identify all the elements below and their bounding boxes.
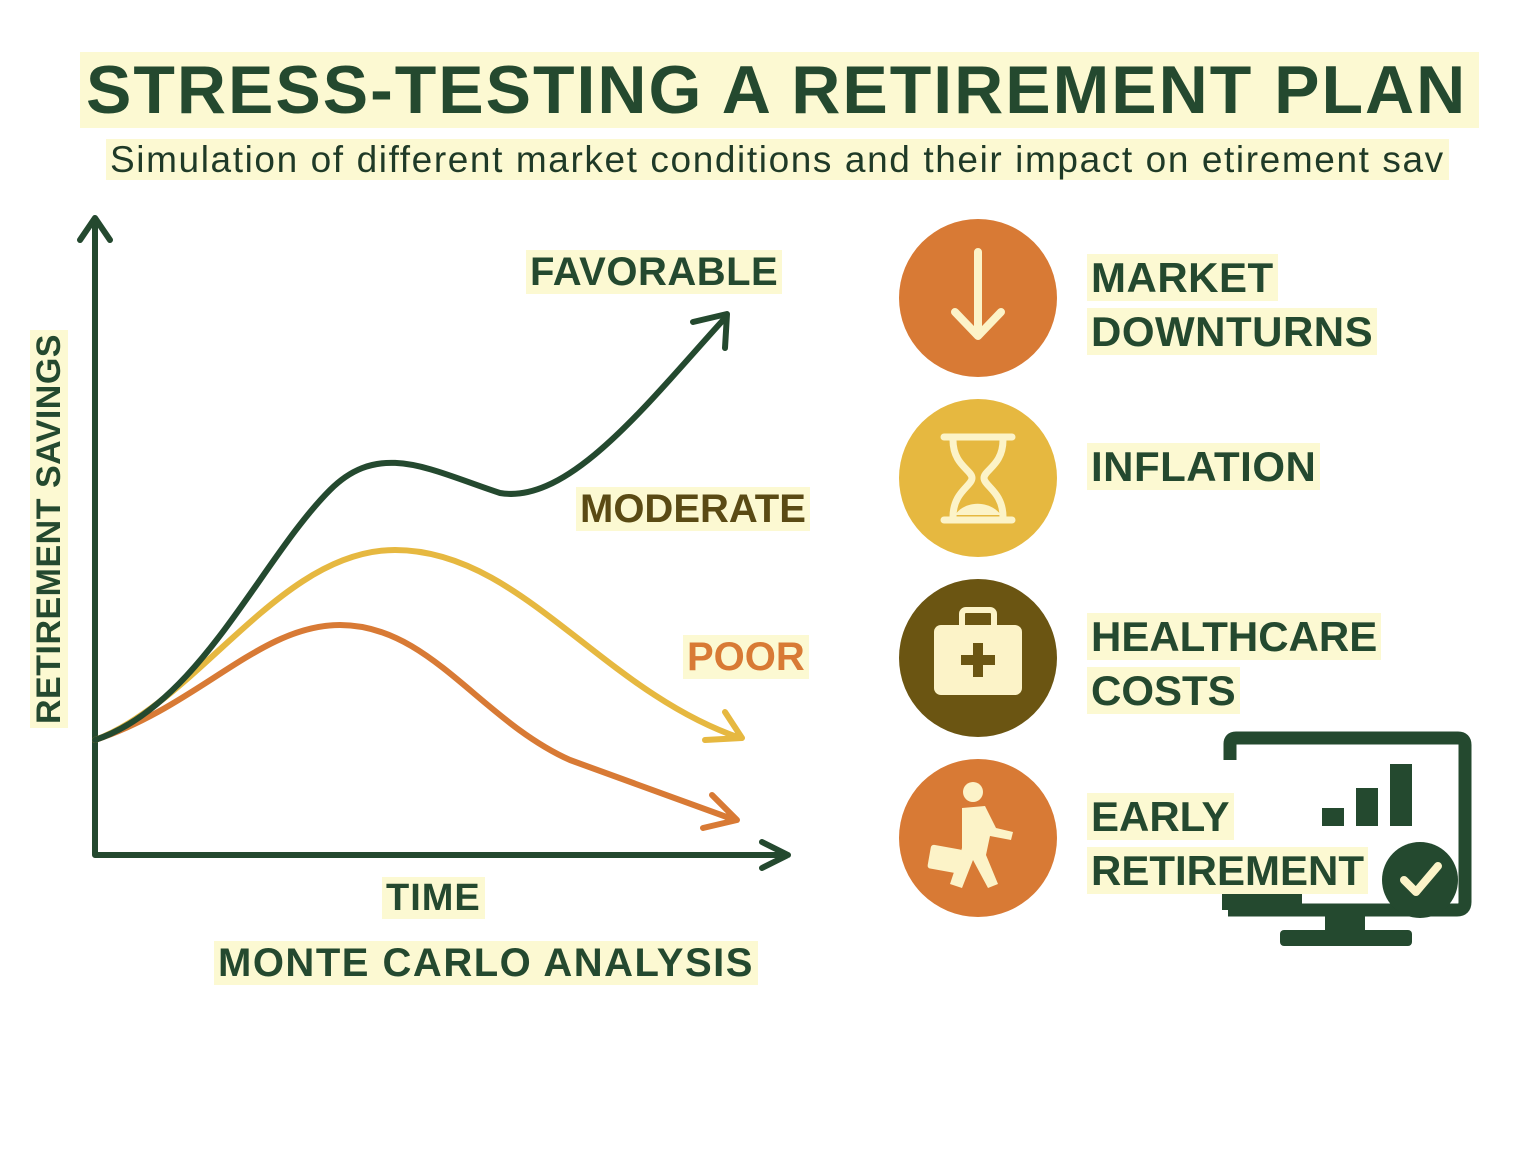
label poor: POOR [687, 635, 805, 679]
title: STRESS-TESTING A RETIREMENT PLAN [86, 52, 1467, 128]
curve: moderate [95, 550, 742, 740]
factor label: inflation: INFLATION [1091, 443, 1316, 490]
factor label: early retirement: RETIREMENT [1091, 847, 1364, 894]
factor label: early retirement [1087, 793, 1368, 894]
factor label: market downturns [1087, 254, 1377, 355]
icon: walking person [899, 759, 1057, 917]
subtitle: Simulation of different market conditions and their impact on etirement sav [110, 139, 1445, 180]
x axis label: TIME [386, 877, 481, 919]
curve: poor [95, 625, 737, 828]
icon: down arrow [899, 219, 1057, 377]
icon: monitor with chart [1222, 738, 1465, 946]
label favorable: FAVORABLE [530, 250, 778, 294]
curve: favorable [95, 314, 727, 740]
factor label: healthcare costs: COSTS [1091, 667, 1236, 714]
factor label: healthcare costs [1087, 613, 1381, 714]
axes [80, 218, 788, 868]
label moderate: MODERATE [580, 487, 806, 531]
factor label: early retirement: EARLY [1091, 793, 1230, 840]
icon: hourglass [899, 399, 1057, 557]
icon: medical kit [899, 579, 1057, 737]
factor label: market downturns: DOWNTURNS [1091, 308, 1373, 355]
factor label: market downturns: MARKET [1091, 254, 1274, 301]
footer label: MONTE CARLO ANALYSIS [218, 941, 754, 985]
y axis label: RETIREMENT SAVINGS [30, 334, 68, 724]
factor label: healthcare costs: HEALTHCARE [1091, 613, 1377, 660]
